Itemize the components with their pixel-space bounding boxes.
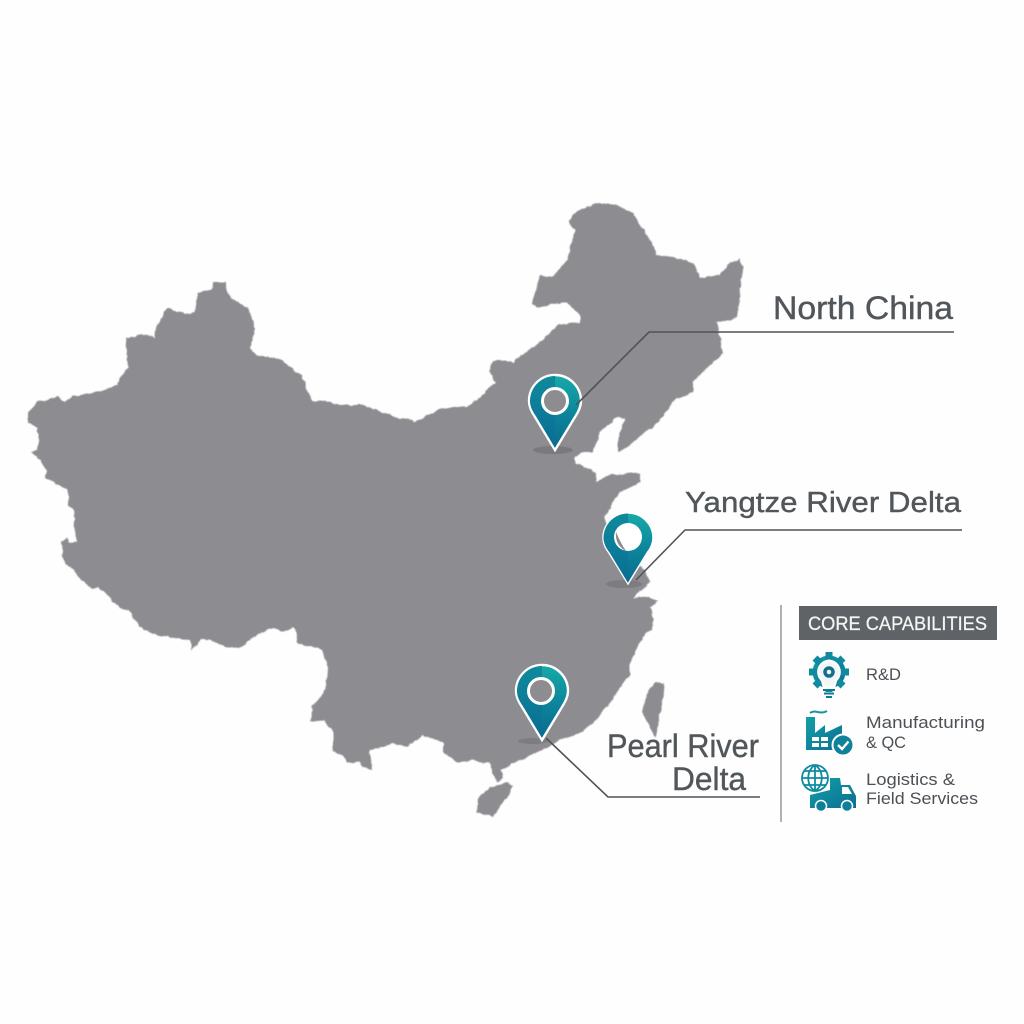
icon: R&D gear and light bulb bbox=[809, 652, 849, 697]
capability: Logistics & Field Services: Logistics & bbox=[866, 770, 956, 789]
panel heading bbox=[799, 606, 997, 640]
pin: Pearl River Delta bbox=[516, 665, 568, 744]
pin: Yangtze River Delta bbox=[603, 513, 653, 588]
panel: core capabilities bbox=[780, 605, 997, 822]
capability: Manufacturing & QC: & QC bbox=[866, 733, 906, 752]
Taiwan bbox=[642, 682, 664, 737]
Hainan bbox=[477, 783, 513, 817]
label: Pearl River Delta: Delta bbox=[672, 761, 746, 797]
pin: North China bbox=[529, 375, 581, 454]
capability: Logistics & Field Services: Field Services bbox=[866, 789, 978, 808]
icon: globe and delivery truck bbox=[801, 764, 856, 812]
label: Pearl River Delta bbox=[607, 728, 759, 797]
panel heading: CORE CAPABILITIES bbox=[808, 614, 987, 635]
mainland silhouette bbox=[28, 203, 743, 782]
leader line: Pearl River Delta bbox=[546, 738, 760, 797]
map of China bbox=[28, 203, 743, 817]
leader line: North China bbox=[576, 332, 954, 405]
capability: Manufacturing & QC bbox=[866, 713, 985, 752]
label: Yangtze River Delta: Yangtze River Delta bbox=[685, 487, 962, 519]
capability: Logistics & Field Services bbox=[866, 770, 978, 808]
label: Pearl River Delta: Pearl River bbox=[607, 728, 759, 764]
label: North China: North China bbox=[773, 290, 953, 326]
capability: Manufacturing & QC: Manufacturing bbox=[866, 713, 985, 732]
capability: R&D: R&D bbox=[866, 666, 901, 684]
icon: factory with check mark bbox=[806, 711, 854, 756]
leader line: Yangtze River Delta bbox=[636, 530, 962, 580]
